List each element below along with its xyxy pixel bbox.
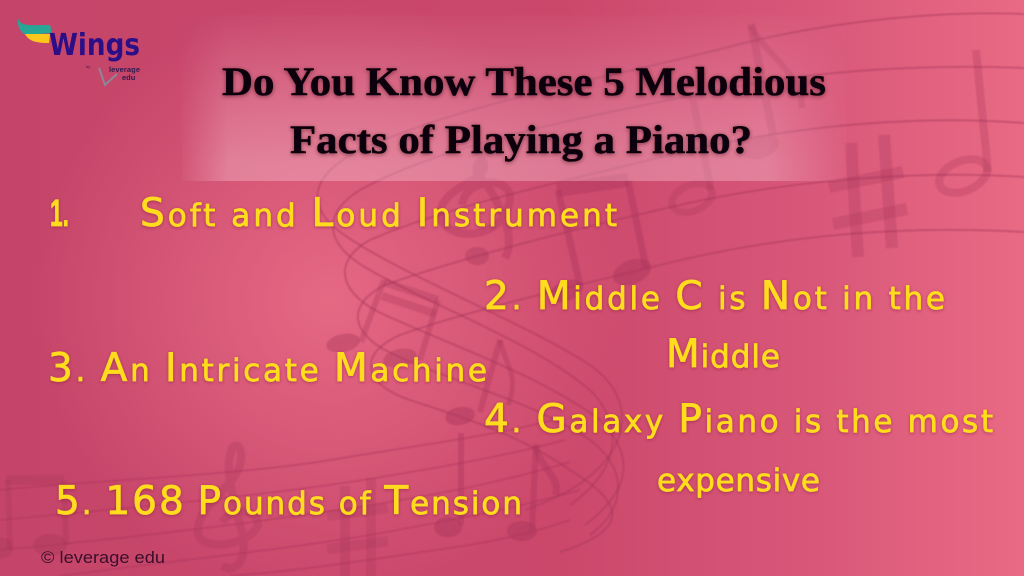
fact 1 (50, 191, 617, 236)
icon: yellow wing (25, 34, 50, 43)
fact 4 (484, 397, 993, 499)
fact 4 line 1: 4. Galaxy Piano is the most (484, 397, 993, 442)
title (222, 59, 826, 162)
fact 3: 3. An Intricate Machine (48, 346, 487, 391)
icon: bottom treble clef (198, 446, 258, 568)
logo wordmark: Wings (49, 28, 140, 63)
icon: sharp sign right (829, 135, 907, 257)
icon: bottom eighth note (507, 444, 557, 541)
fact 1 number: 1. (50, 193, 69, 235)
logo: leverage: leverage (109, 65, 140, 74)
logo mark (99, 68, 117, 85)
logo: Wings by leverage edu (18, 18, 140, 85)
icon: note head of clef (465, 247, 489, 265)
fact 5: 5. 168 Pounds of Tension (55, 479, 522, 524)
fact 1 text: Soft and Loud Instrument (140, 191, 617, 236)
fact 2 line 2: Middle (666, 332, 780, 377)
icon: eighth note centre (444, 340, 513, 427)
icon: beamed notes centre (546, 180, 655, 307)
staff: lower left staff (0, 418, 580, 576)
icon: bottom single note (434, 433, 462, 537)
title line 2: Facts of Playing a Piano? (290, 117, 752, 162)
logo: edu: edu (122, 73, 136, 82)
title line 1: Do You Know These 5 Melodious (222, 59, 826, 104)
fact 2 line 1: 2. Middle C is Not in the (484, 274, 945, 319)
icon: eighth note top (739, 24, 802, 164)
logo: by: by (86, 64, 90, 69)
fact 4 line 2: expensive (657, 463, 820, 499)
icon: teal wing (18, 18, 52, 35)
footer credit: © leverage edu (41, 549, 165, 567)
icon: beamed notes left (325, 280, 438, 370)
icon: treble clef centre (440, 160, 510, 258)
icon: hollow note top centre (668, 96, 716, 218)
title panel (188, 31, 839, 181)
staff: swirling upper staff (317, 13, 1024, 552)
icon: bottom beamed notes (0, 480, 67, 559)
icon: bottom sharp sign (327, 478, 388, 576)
fact 2 (484, 274, 945, 377)
icon: half note right (934, 50, 992, 199)
